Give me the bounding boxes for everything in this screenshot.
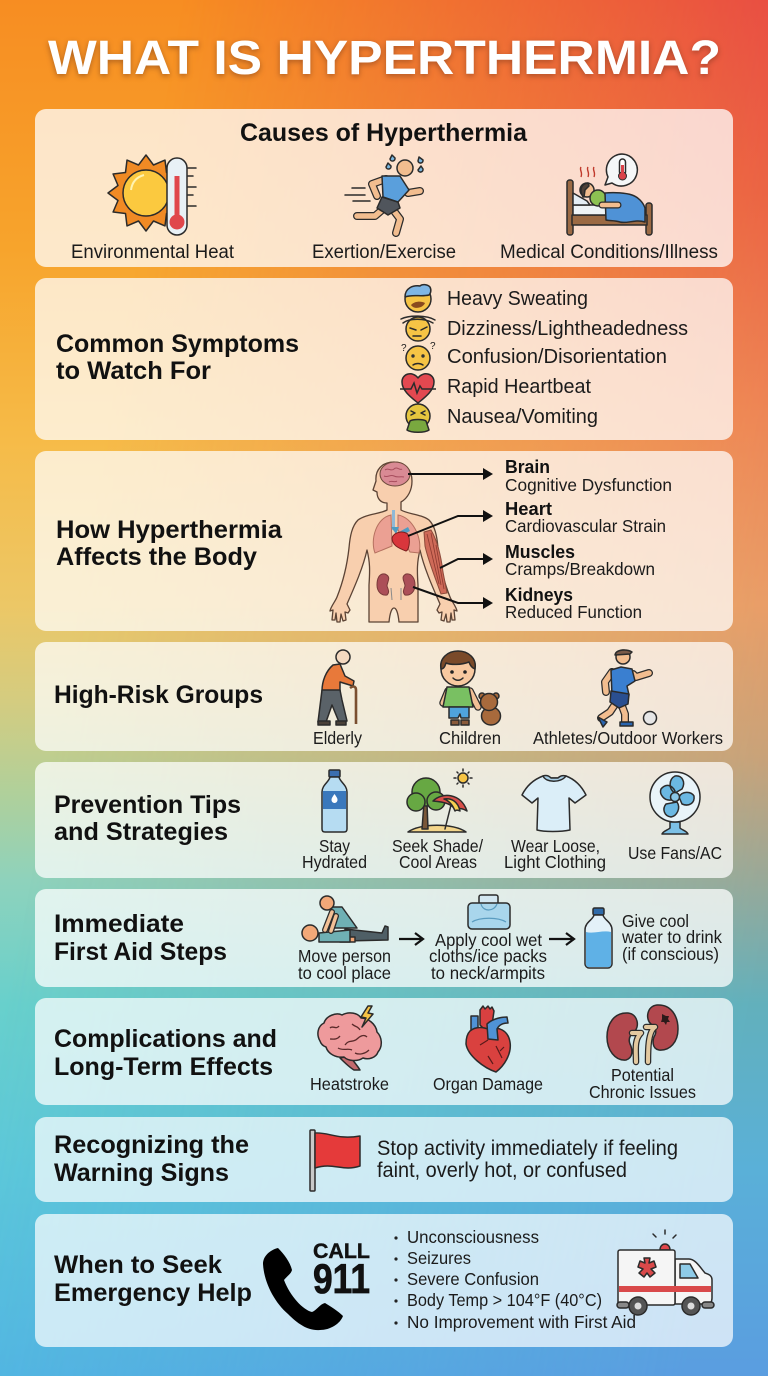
panel: prevention — [35, 762, 733, 878]
label: give water — [621, 911, 722, 964]
panel: effects on the body — [35, 451, 733, 631]
icon: ambulance — [617, 1230, 714, 1315]
panel: causes — [35, 109, 733, 267]
title: WHAT IS HYPERTHERMIA? — [48, 32, 721, 85]
label: environmental heat: Environmental Heat — [71, 242, 235, 263]
icon: athlete — [598, 650, 656, 727]
symptom list: Nausea/Vomiting — [447, 405, 598, 428]
call 911: 911 — [313, 1255, 370, 1302]
icon: phone handset — [263, 1248, 343, 1330]
panel: complications — [35, 998, 733, 1105]
emergency signs list: Seizures — [407, 1248, 471, 1268]
icon: ice pack — [468, 895, 510, 929]
label: brain — [505, 457, 672, 495]
panel: first aid — [35, 889, 733, 987]
symptom list: Rapid Heartbeat — [447, 375, 591, 398]
label: clothing — [504, 836, 606, 872]
emergency signs list: No Improvement with First Aid — [407, 1312, 636, 1332]
label: stay hydrated — [302, 836, 367, 872]
call 911: CALL — [313, 1240, 370, 1263]
label: apply cloths — [429, 930, 547, 983]
label: heart — [505, 499, 666, 536]
heading: prevention — [54, 791, 241, 846]
symptom list — [447, 287, 688, 428]
panel: warning signs — [35, 1117, 733, 1202]
label: organ damage: Organ Damage — [433, 1074, 543, 1094]
label: muscles — [505, 542, 655, 579]
heading: prevention: and Strategies — [54, 818, 228, 846]
icon: red flag — [310, 1130, 360, 1191]
label: fans: Use Fans/AC — [628, 843, 722, 863]
label: give water: water to drink — [621, 927, 722, 947]
label: move person: to cool place — [298, 963, 391, 983]
icon: kidneys — [607, 1005, 678, 1062]
heading: symptoms: to Watch For — [56, 357, 211, 385]
label: clothing: Light Clothing — [504, 852, 606, 872]
label: apply cloths: to neck/armpits — [431, 963, 545, 983]
label: apply cloths: cloths/ice packs — [429, 946, 547, 966]
label: clothing: Wear Loose, — [511, 836, 600, 856]
label: chronic issues — [589, 1065, 696, 1102]
symptom list: Dizziness/Lightheadedness — [447, 317, 688, 340]
label: elderly: Elderly — [313, 728, 362, 748]
label: seek shade: Seek Shade/ — [392, 836, 483, 856]
icon: heart — [466, 1006, 510, 1072]
icon: tree and umbrella — [407, 769, 472, 832]
label: move person — [298, 946, 391, 983]
heading: emergency — [54, 1251, 252, 1307]
emergency signs list — [394, 1227, 636, 1332]
heading: prevention: Prevention Tips — [54, 791, 241, 819]
anatomy figure — [330, 462, 457, 622]
icon: child with teddy bear — [441, 651, 500, 725]
icon: runner — [345, 155, 423, 233]
emergency signs list: Unconsciousness — [407, 1227, 539, 1247]
label: chronic issues: Chronic Issues — [589, 1082, 696, 1102]
label: kidneys: Reduced Function — [505, 602, 642, 622]
panel: symptoms — [35, 278, 733, 440]
symptom list: Confusion/Disorientation — [447, 345, 667, 368]
label: kidneys: Kidneys — [505, 585, 573, 605]
heading: symptoms — [56, 330, 299, 385]
icon: confused face — [401, 341, 436, 370]
heading: warning signs: Recognizing the — [54, 1131, 249, 1159]
heading: complications: Complications and — [54, 1025, 277, 1053]
icon: sun and thermometer — [108, 155, 196, 235]
icon: sweating face — [405, 285, 431, 312]
label: athletes: Athletes/Outdoor Workers — [533, 728, 723, 748]
label: chronic issues: Potential — [611, 1065, 674, 1085]
label: give water: Give cool — [622, 911, 689, 931]
label: brain: Cognitive Dysfunction — [505, 475, 672, 495]
icon: elderly person — [318, 650, 356, 725]
heading: first aid: Immediate — [54, 910, 184, 938]
label: muscles: Muscles — [505, 542, 575, 562]
heading: body effects: How Hyperthermia — [56, 516, 283, 544]
panel: emergency help — [35, 1214, 733, 1347]
label: seek shade: Cool Areas — [399, 852, 477, 872]
arrow: step 1 to 2 — [399, 933, 423, 945]
icon: water bottle to drink — [585, 908, 612, 968]
heading: first aid: First Aid Steps — [54, 938, 227, 966]
label: heart: Heart — [505, 499, 552, 519]
label: children: Children — [439, 728, 501, 748]
label: seek shade — [392, 836, 483, 872]
icon: water bottle — [322, 770, 347, 832]
heading: emergency: When to Seek — [54, 1251, 222, 1279]
heading: first aid — [54, 910, 227, 966]
call 911 — [313, 1240, 370, 1302]
label: muscles: Cramps/Breakdown — [505, 559, 655, 579]
label: kidneys — [505, 585, 642, 622]
icon: heartbeat — [400, 374, 436, 403]
icon: brain — [318, 1006, 381, 1070]
warning text: Stop activity immediately if feeling — [377, 1136, 678, 1160]
heading: warning signs: Warning Signs — [54, 1159, 229, 1187]
label: exertion: Exertion/Exercise — [312, 242, 456, 263]
label: brain: Brain — [505, 457, 550, 477]
arrows: organs to labels — [408, 468, 493, 609]
arrow: step 2 to 3 — [549, 933, 574, 945]
icon: confused face: ? — [430, 341, 436, 352]
warning text: faint, overly hot, or confused — [377, 1158, 627, 1182]
label: medical conditions: Medical Conditions/Illness — [500, 242, 718, 263]
heading: complications: Long-Term Effects — [54, 1053, 273, 1081]
heading: warning signs — [54, 1131, 249, 1187]
icon: confused face: ? — [401, 343, 407, 354]
icon: person in bed — [567, 154, 652, 235]
panel: high-risk groups — [35, 642, 733, 751]
warning text — [377, 1136, 678, 1182]
label: heatstroke: Heatstroke — [310, 1074, 389, 1094]
heading: body effects — [56, 516, 283, 571]
heading: complications — [54, 1025, 277, 1081]
label: stay hydrated: Stay — [319, 836, 350, 856]
heading: causes: Causes of Hyperthermia — [240, 119, 528, 147]
icon: nausea face — [406, 404, 430, 432]
emergency signs list: Severe Confusion — [407, 1269, 539, 1289]
label: stay hydrated: Hydrated — [302, 852, 367, 872]
label: give water: (if conscious) — [622, 944, 719, 964]
icon: dizzy face — [401, 316, 435, 341]
heading: body effects: Affects the Body — [56, 543, 257, 571]
heading: emergency: Emergency Help — [54, 1279, 252, 1307]
heading: symptoms: Common Symptoms — [56, 330, 299, 358]
label: move person: Move person — [298, 946, 391, 966]
label: apply cloths: Apply cool wet — [435, 930, 542, 950]
icon: helper moving person — [302, 896, 388, 942]
icon: fan — [650, 772, 700, 834]
emergency signs list: Body Temp > 104°F (40°C) — [407, 1290, 602, 1310]
symptom list: Heavy Sweating — [447, 287, 588, 310]
heading: high-risk: High-Risk Groups — [54, 681, 263, 709]
icon: t-shirt — [522, 776, 586, 832]
label: heart: Cardiovascular Strain — [505, 516, 666, 536]
